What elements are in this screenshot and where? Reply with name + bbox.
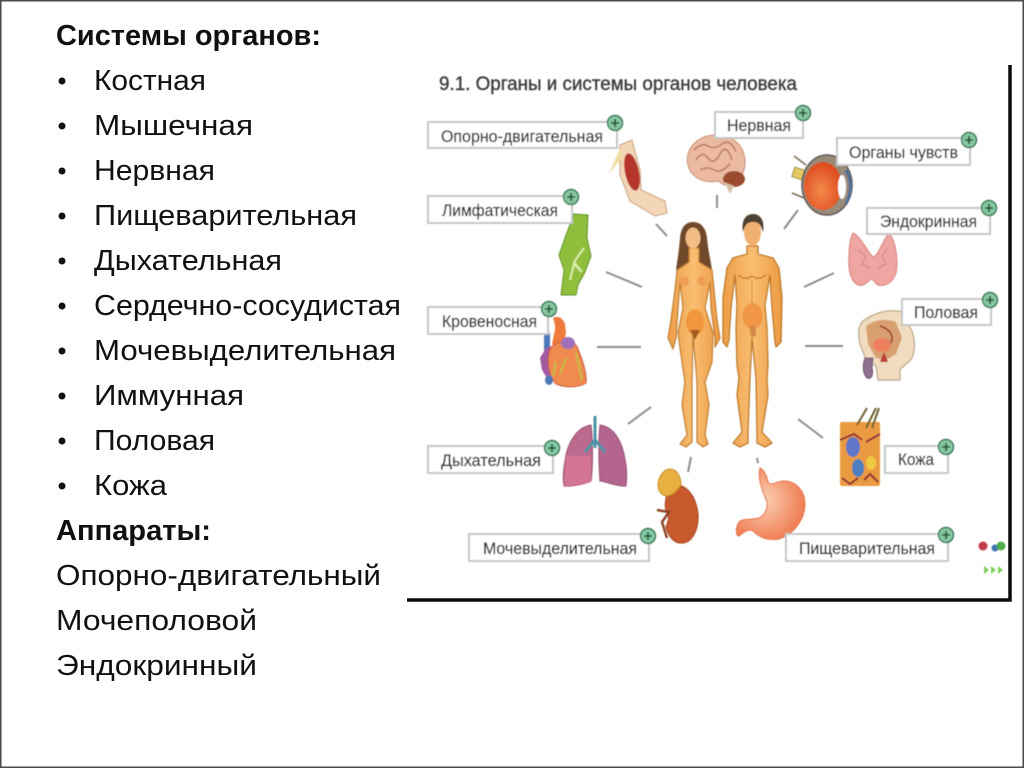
label: reproductive: [902, 292, 998, 325]
connector lines: [597, 195, 843, 472]
figure: woman: [668, 222, 720, 447]
label: skin: Кожа: [898, 450, 934, 469]
heading: organ systems: Системы органов:: [56, 20, 321, 52]
text block: organ systems and apparatus lists: [56, 20, 401, 682]
list: apparatus: Опорно-двигательный: [56, 560, 381, 592]
icon: thyroid gland: [849, 233, 897, 286]
icon: kidney: [657, 469, 698, 543]
list: apparatus: Мочеполовой: [56, 605, 257, 637]
list: organ systems: Дыхательная: [94, 245, 282, 277]
icon: eye: [792, 155, 852, 215]
icon: reproductive organs: [859, 311, 914, 380]
icon: lymph vessel: [559, 214, 591, 295]
label: reproductive: Половая: [914, 303, 978, 322]
heading: apparatus: Аппараты:: [56, 515, 211, 547]
icon: skin cross-section: [840, 408, 880, 486]
icon: arm muscles: [609, 140, 667, 216]
list: organ systems: Иммунная: [94, 380, 244, 412]
label: nervous: Нервная: [727, 116, 791, 135]
label: respiratory: [428, 440, 560, 473]
list: organ systems: Пищеварительная: [94, 200, 357, 232]
label: urinary: Мочевыделительная: [483, 539, 637, 558]
label: digestive: Пищеварительная: [799, 539, 935, 558]
icon: heart: [540, 317, 586, 387]
label: respiratory: Дыхательная: [441, 451, 541, 470]
list: organ systems: Костная: [94, 65, 206, 97]
diagram frame: [407, 65, 1010, 600]
label: musculoskeletal: Опорно-двигательная: [441, 127, 603, 146]
list: apparatus: Эндокринный: [56, 650, 257, 682]
icon: brain: [687, 135, 745, 194]
label: endocrine: [867, 200, 996, 234]
list: organ systems: Сердечно-сосудистая: [94, 290, 401, 322]
label: sense organs: [837, 132, 976, 165]
label: endocrine: Эндокринная: [880, 212, 977, 231]
label: circulatory: [428, 302, 556, 334]
icon: stomach: [736, 468, 805, 540]
label: skin: [885, 440, 954, 473]
list: apparatus: [56, 560, 381, 682]
list: organ systems: Половая: [94, 425, 215, 457]
label: lymphatic: Лимфатическая: [442, 201, 558, 220]
label: nervous: [715, 106, 810, 138]
label: musculoskeletal: [428, 116, 622, 148]
figure: man: [723, 214, 782, 447]
list: organ systems: Мочевыделительная: [94, 335, 396, 367]
list: organ systems: Нервная: [94, 155, 215, 187]
label: digestive: [786, 528, 954, 561]
illustration group: [428, 106, 1006, 574]
list: organ systems: Кожа: [94, 470, 168, 502]
panel: human organs diagram: [407, 65, 1010, 600]
label: sense organs: Органы чувств: [849, 143, 958, 162]
list: organ systems: Мышечная: [94, 110, 253, 142]
diagram title: 9.1. Органы и системы органов человека: [439, 74, 797, 95]
list: organ systems: [58, 65, 401, 502]
label: lymphatic: [428, 190, 578, 223]
navigation icons: [978, 542, 1006, 574]
label: urinary: [469, 528, 656, 561]
icon: lungs: [563, 416, 627, 486]
label: circulatory: Кровеносная: [442, 312, 537, 331]
